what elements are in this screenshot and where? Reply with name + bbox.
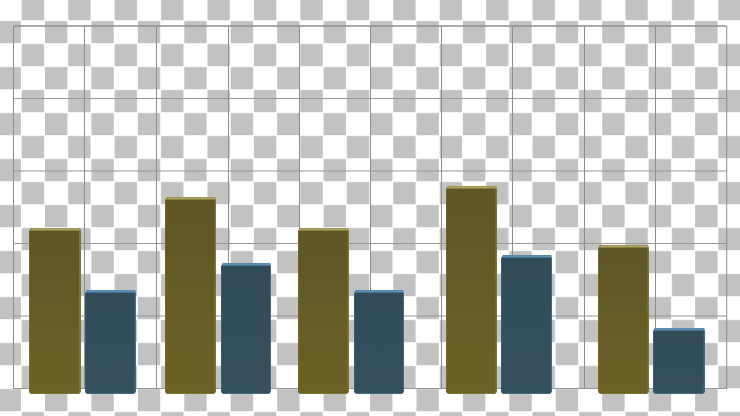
bar chart: [29, 186, 705, 394]
group 2 olive bar: [165, 197, 216, 394]
group 4 olive bar: [446, 186, 497, 394]
group 3 olive bar: [298, 228, 349, 394]
group 4 blue bar: [501, 255, 552, 394]
group 5 blue bar: [653, 328, 705, 394]
group 1 olive bar: [29, 228, 81, 394]
group 1 blue bar: [85, 290, 136, 394]
group 3 blue bar: [354, 290, 404, 394]
group 5 olive bar: [598, 245, 649, 394]
group 2 blue bar: [221, 263, 271, 394]
